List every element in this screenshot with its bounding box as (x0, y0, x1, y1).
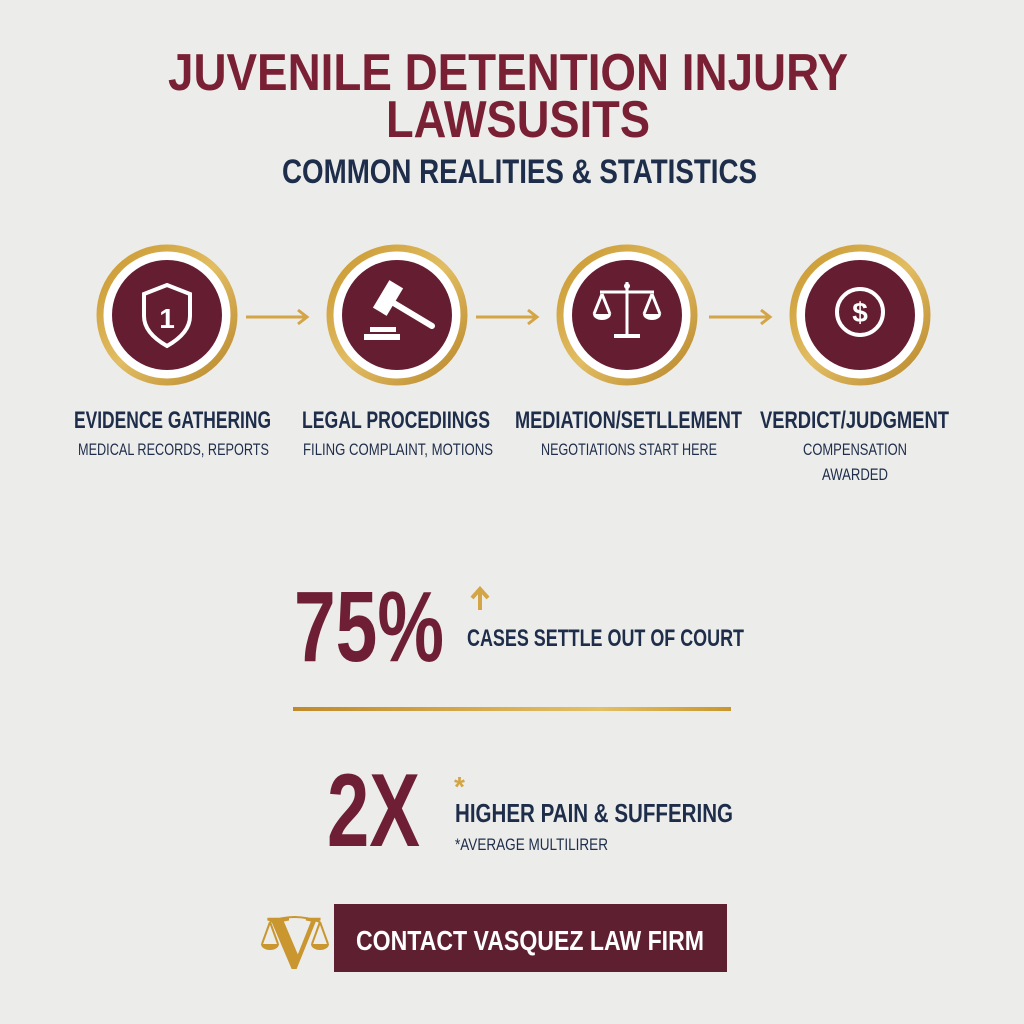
stat: 75%: 75% (294, 571, 444, 683)
icon: up arrow (472, 589, 488, 610)
step 3: mediation (515, 248, 742, 459)
step 2: legal proceedings: LEGAL PROCEDIINGS (302, 407, 490, 434)
stat: 2X: 2X (327, 753, 420, 869)
step 1: evidence gathering: MEDICAL RECORDS, REPORTS (78, 440, 269, 459)
step 4: verdict: AWARDED (822, 465, 888, 484)
stat: 2X: *AVERAGE MULTILIRER (455, 835, 608, 854)
icon: scales (560, 248, 694, 382)
stat: 2X (327, 753, 733, 869)
stat: 2X: HIGHER PAIN & SUFFERING (455, 798, 733, 828)
step 1: evidence gathering: EVIDENCE GATHERING (74, 407, 271, 434)
subtitle: COMMON REALITIES & STATISTICS (282, 153, 757, 191)
title: LAWSUSITS (386, 91, 650, 149)
button: contact (334, 904, 727, 972)
arrow 1 (246, 310, 307, 324)
title: JUVENILE DETENTION INJURY (168, 44, 848, 102)
button: contact: CONTACT VASQUEZ LAW FIRM (356, 925, 704, 956)
step 3: mediation: MEDIATION/SETLLEMENT (515, 407, 742, 434)
arrow 3 (709, 310, 770, 324)
title (168, 44, 848, 149)
step 4: verdict: COMPENSATION (803, 440, 907, 459)
step 2: legal proceedings (302, 248, 493, 459)
arrow 2 (476, 310, 537, 324)
step 3: mediation: NEGOTIATIONS START HERE (541, 440, 717, 459)
step 4: verdict: VERDICT/JUDGMENT (760, 407, 949, 434)
icon: dollar coin (793, 248, 927, 382)
step 1: evidence gathering (74, 248, 271, 459)
icon: dollar coin: $ (852, 297, 868, 328)
stat: 75%: CASES SETTLE OUT OF COURT (467, 625, 744, 652)
stat: 2X: * (454, 771, 465, 802)
step 2: legal proceedings: FILING COMPLAINT, MOTIONS (303, 440, 493, 459)
step 4: verdict (760, 248, 949, 484)
icon: shield: 1 (159, 303, 175, 334)
stat: 75% (294, 571, 744, 683)
logo: V scales: V (267, 901, 322, 985)
icon: gavel (330, 248, 464, 382)
icon: shield (100, 248, 234, 382)
